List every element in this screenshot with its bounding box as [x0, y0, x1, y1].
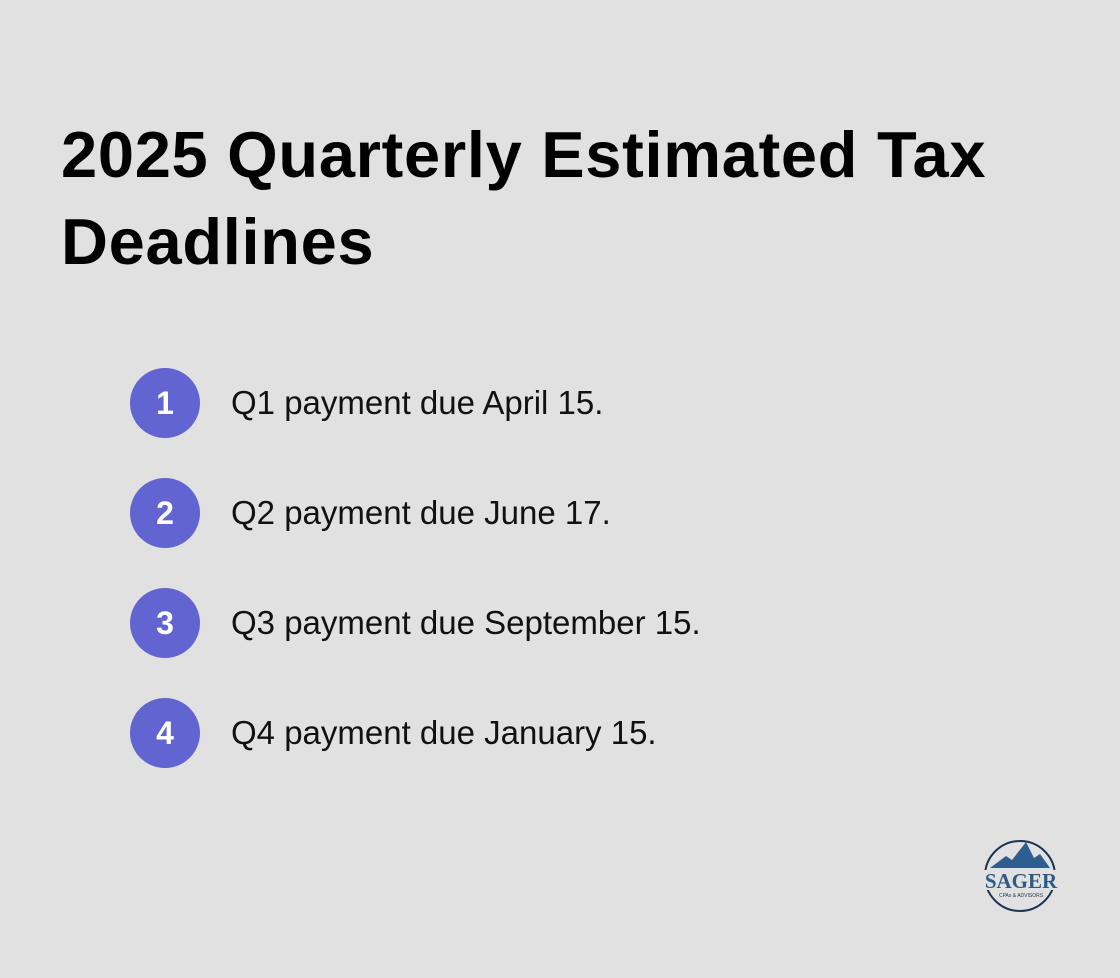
- logo: CPAs & ADVISORS: [999, 893, 1044, 899]
- title: 2025 Quarterly Estimated Tax: [61, 118, 986, 191]
- item 1: 1: [156, 385, 174, 421]
- item 3: 3: [156, 605, 174, 641]
- item 1: [130, 368, 603, 438]
- logo: SAGER: [985, 869, 1058, 893]
- item 4: [130, 698, 657, 768]
- title: Deadlines: [61, 205, 374, 278]
- item 1: Q1 payment due April 15.: [231, 384, 603, 421]
- item 2: [130, 478, 611, 548]
- title: [61, 118, 986, 278]
- item 3: Q3 payment due September 15.: [231, 604, 701, 641]
- item 4: Q4 payment due January 15.: [231, 714, 657, 751]
- item 2: 2: [156, 495, 174, 531]
- item 2: Q2 payment due June 17.: [231, 494, 611, 531]
- logo: [984, 840, 1058, 912]
- item 3: [130, 588, 701, 658]
- item 4: 4: [156, 715, 174, 751]
